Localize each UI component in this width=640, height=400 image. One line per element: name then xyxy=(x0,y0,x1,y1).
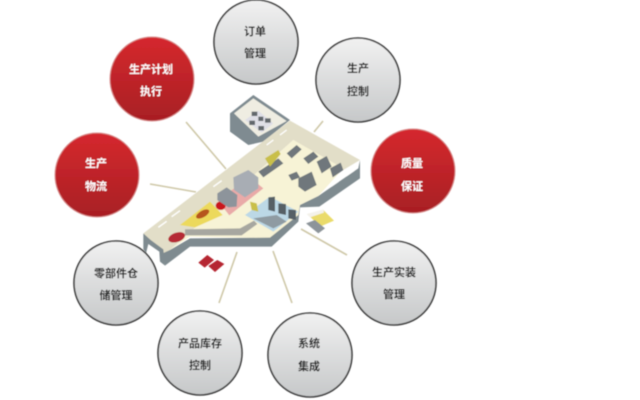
circle: 系统集成: 系统 xyxy=(298,336,320,350)
circle: 系统集成: 集成 xyxy=(298,359,320,373)
circle: 零部件仓储管理: 零部件仓 xyxy=(94,266,138,280)
red pallets xyxy=(198,255,224,272)
circle: 生产实装管理: 生产实装 xyxy=(372,265,416,279)
circle: 产品库存控制: 控制 xyxy=(189,358,211,372)
conveyor line xyxy=(185,221,257,235)
main hall floor xyxy=(170,140,343,250)
corridor xyxy=(143,121,360,253)
circle: 生产物流: 物流 xyxy=(85,179,107,193)
circle: 生产计划执行: 执行 xyxy=(140,84,162,98)
circle: 生产控制: 控制 xyxy=(347,84,369,98)
yellow and red production zones xyxy=(167,177,298,244)
circle: 订单管理: 订单 xyxy=(244,24,266,38)
upper office room xyxy=(230,95,290,145)
circle: 生产计划执行: 生产计划 xyxy=(129,62,173,76)
circle: 生产控制: 生产 xyxy=(347,61,369,75)
circle: 零部件仓储管理 xyxy=(74,241,158,325)
factory floor plan xyxy=(143,95,360,272)
circle: 质量保证: 保证 xyxy=(401,180,423,193)
corridor markings xyxy=(158,130,354,227)
circle: 生产实装管理 xyxy=(352,241,436,325)
circle: 订单管理: 管理 xyxy=(244,46,266,60)
circle: 零部件仓储管理: 储管理 xyxy=(100,288,132,302)
connector lines xyxy=(150,121,347,303)
outside loading dock xyxy=(306,209,334,233)
circle: 产品库存控制 xyxy=(158,311,242,395)
circle: 订单管理 xyxy=(214,0,298,84)
circle: 生产实装管理: 管理 xyxy=(383,287,405,301)
outer walls xyxy=(143,160,360,266)
circle: 系统集成 xyxy=(268,313,352,397)
circle: 质量保证 xyxy=(371,129,455,213)
circle: 质量保证: 质量 xyxy=(401,156,423,170)
machinery xyxy=(217,145,343,228)
circle: 生产物流 xyxy=(55,133,139,217)
circle: 生产控制 xyxy=(316,38,400,122)
circle: 产品库存控制: 产品库存 xyxy=(178,336,222,350)
circle: 生产物流: 生产 xyxy=(85,156,107,170)
circle: 生产计划执行 xyxy=(110,37,194,121)
